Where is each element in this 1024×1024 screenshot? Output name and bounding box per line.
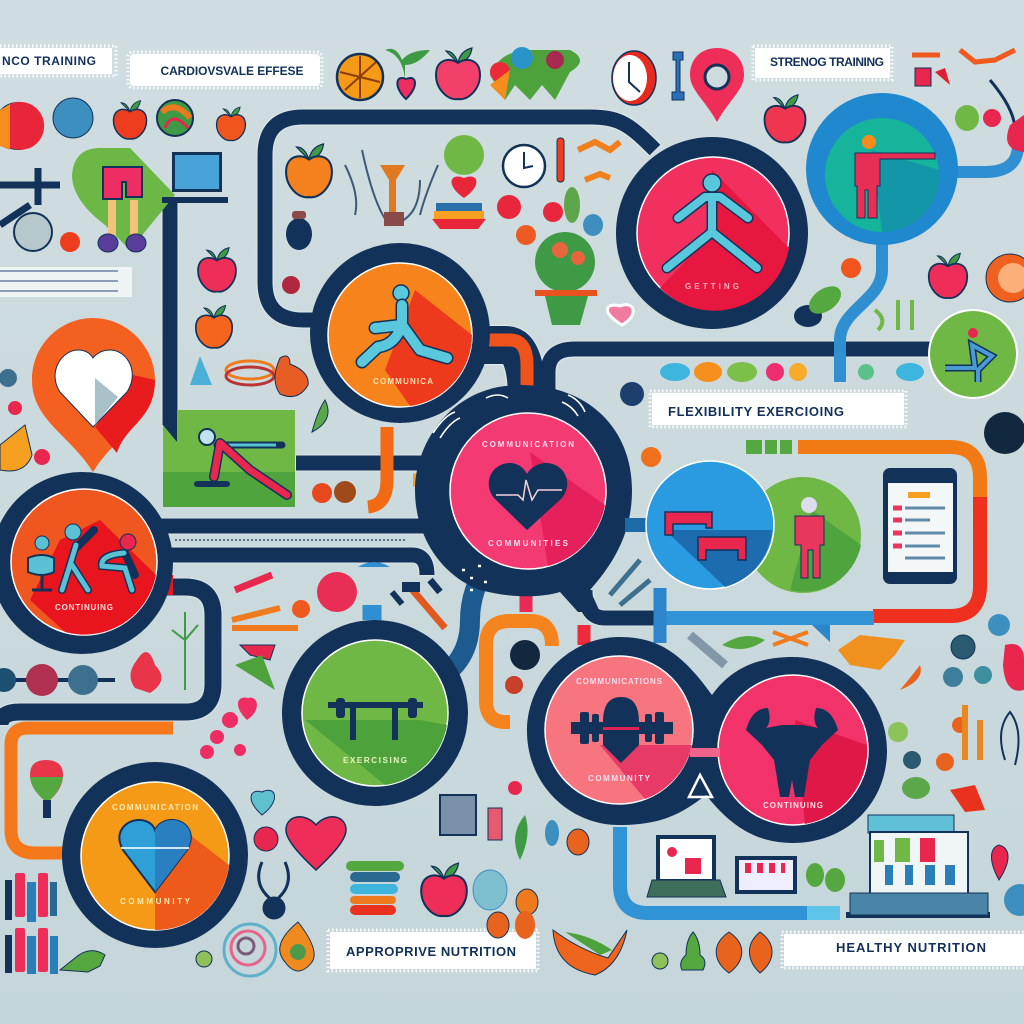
- icon: green pair: [794, 281, 846, 327]
- icon: pink drop: [991, 845, 1008, 880]
- icon: apple: [765, 95, 805, 142]
- icon: bowl bottom: [553, 930, 627, 975]
- icon: lunging runner: [362, 285, 447, 362]
- icon: orange cross: [773, 632, 808, 645]
- icon: platform blocks: [665, 512, 746, 560]
- icon: tools right of centre: [610, 560, 650, 605]
- link to blue circle: [625, 518, 665, 532]
- icon: sports items top right: [912, 50, 1015, 86]
- icon: red ball: [60, 232, 80, 252]
- text stripe panel: [0, 267, 132, 297]
- node: green barbell: [282, 620, 468, 806]
- icon: fruit basket: [490, 47, 580, 100]
- icon: gourd: [275, 356, 308, 397]
- icon: hearts small: [251, 790, 275, 815]
- node: red-orange group of people: [0, 472, 173, 654]
- icon: apple: [114, 100, 146, 139]
- icon: stalks: [875, 300, 912, 330]
- node: central heart: COMMUNITIES: [488, 539, 569, 548]
- icon: laptop: [647, 835, 726, 897]
- icon: leaf plant: [172, 612, 198, 690]
- icons: left column: [0, 98, 1024, 670]
- icon: blue disc: [53, 98, 93, 138]
- icons: top row: [337, 47, 1024, 152]
- icon: orange figure right: [965, 705, 980, 760]
- icons: lower left: [0, 575, 772, 976]
- icon: small tablet: [735, 856, 797, 894]
- icon: striped ball: [157, 100, 193, 136]
- icon: apples and plant: [497, 187, 603, 245]
- node: top pink stretching figure: GETTING: [685, 282, 739, 291]
- icon: triangle: [689, 775, 712, 797]
- icon: green leaf: [60, 951, 105, 972]
- icon: leaf: [722, 636, 765, 649]
- node: orange runner: COMMUNICA: [373, 377, 433, 386]
- icon: gourd bottom: [280, 922, 314, 971]
- label: healthy nutrition: HEALTHY NUTRITION: [836, 940, 986, 955]
- node: orange runner: [310, 243, 490, 423]
- icon: heart with pulse: [489, 463, 567, 530]
- green blocks on connector: [746, 440, 792, 454]
- central dark blob: [415, 385, 632, 668]
- node: magenta muscle figure: CONTINUING: [763, 801, 823, 810]
- icons: lower right: [392, 560, 1024, 918]
- node: salmon weight plate: COMMUNITY: [588, 774, 651, 783]
- icon: bowl right: [1003, 644, 1024, 691]
- label: endurance training: [0, 46, 116, 76]
- icon: ball half: [0, 102, 44, 150]
- icon: hoop bands: [226, 361, 274, 385]
- icon: small apple: [508, 781, 522, 795]
- icon: trophy lines: [345, 150, 438, 226]
- icon: spiral: [224, 924, 276, 976]
- node: central heart: COMMUNICATION: [482, 440, 574, 449]
- icon: pointing person: [855, 135, 935, 218]
- node: magenta muscle figure: [718, 675, 868, 825]
- icon: flexing muscle torso: [746, 708, 838, 797]
- label: appropriate nutrition: APPROPRIVE NUTRITION: [346, 944, 516, 959]
- icon: computer bar chart: [846, 815, 990, 918]
- icon: layered stack: [432, 203, 486, 229]
- icon: green seed: [196, 951, 212, 967]
- node: orange blue-heart: COMMUNICATION: [112, 803, 198, 812]
- icon: orange chevrons: [578, 142, 620, 180]
- icon: bolt: [672, 52, 684, 100]
- icon: orange figure: [838, 635, 905, 670]
- icon: seated figure: [945, 328, 992, 382]
- dumbbell pair connector: [527, 637, 887, 843]
- pin: heart marker: [32, 318, 155, 472]
- icon: apple: [929, 253, 967, 298]
- icon: dumbbell left: [0, 664, 115, 696]
- panel: green floor exercise: [163, 410, 295, 507]
- icon: orange slice right: [986, 254, 1024, 302]
- icon: pear and stethoscope: [955, 80, 1024, 152]
- icons: inner top area: [286, 135, 1024, 382]
- icon: green leaves: [806, 863, 845, 892]
- label: cardiovascular exercise: CARDIOVSVALE EFFESE: [160, 64, 304, 78]
- icon: dumbbell and helmet: [571, 697, 673, 763]
- icon: stretching figure: [667, 174, 757, 268]
- node: blue circle with blocks: [646, 461, 774, 589]
- icon: white heart: [55, 350, 132, 427]
- panel: green shape with shorts: [72, 148, 175, 252]
- node: green barbell: EXERCISING: [343, 756, 407, 765]
- icon: stethoscope: [259, 862, 288, 918]
- icon: three exercising people: [28, 524, 136, 590]
- icon: small fruits: [487, 820, 589, 939]
- label: flexibility exercising: FLEXIBILITY EXERCIOING: [668, 404, 844, 419]
- icon: red dumbbell: [557, 138, 564, 182]
- icon: blue figurine: [190, 356, 212, 385]
- icon: lifter: [232, 575, 310, 690]
- icon: potted plant: [535, 232, 597, 325]
- icon: barbell: [328, 698, 423, 740]
- icon: blue heart: [119, 820, 191, 892]
- icon: blue disc: [473, 870, 507, 910]
- icon: bottle: [488, 808, 502, 840]
- dots and wave marks on blob: [433, 395, 585, 438]
- node: small green seated figure: [928, 309, 1018, 399]
- node: central heart: [450, 413, 606, 569]
- icon: orange slice: [337, 54, 383, 100]
- icon: pear: [130, 652, 161, 693]
- icon: small leaf: [312, 400, 328, 432]
- connector network: [0, 117, 1018, 920]
- icon: small flower: [505, 676, 523, 694]
- node: top pink stretching figure: [616, 137, 808, 329]
- icon: pencil tool: [690, 635, 725, 665]
- icon: kettle bell: [286, 211, 312, 250]
- icon: orange fruit: [286, 144, 332, 197]
- icon: apple: [217, 107, 245, 141]
- icon: berry cluster: [282, 276, 300, 294]
- icons: right dots: [888, 614, 1010, 812]
- icon: cherry: [385, 49, 430, 99]
- icon: small red figures: [200, 697, 257, 759]
- icon: wall clock: [612, 51, 656, 105]
- node: orange blue-heart: [62, 762, 248, 948]
- icon: hammer tools centre: [392, 580, 445, 628]
- label: strength training: [753, 46, 892, 80]
- icon: apple: [196, 305, 232, 348]
- icon: balloon: [30, 760, 63, 818]
- icon: cycle machine: [0, 168, 60, 251]
- icon: hanger ring: [1001, 712, 1019, 765]
- icon: food stack: [346, 861, 404, 915]
- icon: apple: [421, 863, 467, 916]
- icon: small dots: [0, 258, 1024, 670]
- node: blue/teal pointing figure: [806, 93, 958, 245]
- icon: clock: [503, 145, 545, 187]
- label: flexibility exercising: [650, 391, 906, 427]
- icon: apple: [198, 248, 236, 292]
- label: endurance training: NCO TRAINING: [2, 54, 96, 68]
- node: green circle with person: [745, 477, 861, 593]
- icon: heart large: [286, 817, 346, 870]
- icon: small heart card: [607, 305, 633, 325]
- label: appropriate nutrition: [328, 930, 538, 971]
- icon: green bulb trio: [652, 932, 772, 973]
- icon: apple: [436, 48, 480, 99]
- icon: small oval: [254, 827, 278, 851]
- icon: colored leaves row: [660, 362, 924, 382]
- icon: dumbbells lower left: [5, 873, 58, 974]
- node: orange blue-heart: COMMUNITY: [120, 897, 191, 906]
- icon: monitor: [162, 152, 228, 203]
- icon: right disc: [1004, 884, 1024, 916]
- icon: location pin: [690, 48, 744, 122]
- icon: tablet: [883, 468, 957, 584]
- icon: standing person: [795, 497, 824, 578]
- icon: broccoli heart: [444, 135, 484, 198]
- label: healthy nutrition: [782, 932, 1024, 968]
- node: salmon weight plate: COMMUNICATIONS: [576, 677, 663, 686]
- pink link between plates: [690, 748, 720, 757]
- icon: gymnast: [0, 425, 32, 471]
- node: red-orange group of people: CONTINUING: [55, 603, 113, 612]
- label: strength training: STRENOG TRAINING: [770, 55, 884, 69]
- node: salmon weight plate: [545, 656, 693, 804]
- icon: leaf: [515, 815, 528, 860]
- icon: ketchup panel: [440, 795, 476, 835]
- label: cardiovascular exercise: [128, 52, 322, 88]
